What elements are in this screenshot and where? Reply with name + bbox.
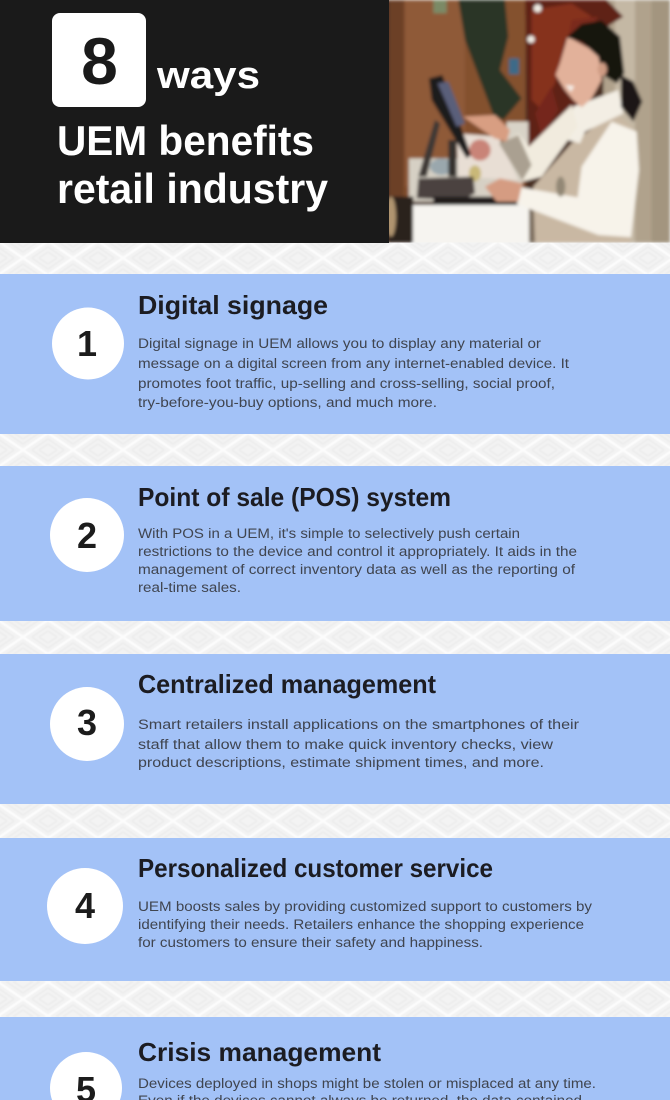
heading: UEM benefits retail industry [57,117,329,212]
description: product descriptions, estimate shipment times, and more. [138,755,544,770]
panel 5: Crisis management [0,1017,670,1100]
number badge 2 [50,498,124,572]
hands [463,115,510,142]
number badge 4: 4 [75,885,95,926]
number badge 1: 1 [77,323,97,364]
description: UEM boosts sales by providing customized support to customers by [138,899,592,914]
heading: UEM benefits retail industry: UEM benefits [57,117,314,164]
description [138,1076,596,1100]
description [138,717,580,770]
heading: Digital signage: Digital signage [138,290,328,320]
description [138,899,592,950]
patterned background [0,243,670,1100]
description: restrictions to the device and control it appropriately. It aids in the [138,544,577,559]
ponytail [621,75,642,122]
panel 3: Centralized management [0,654,670,804]
description: With POS in a UEM, it's simple to selectively push certain [138,526,520,541]
number badge 3: 3 [77,702,97,743]
number badge 1 [52,308,124,380]
face [556,37,602,107]
description: management of correct inventory data as well as the reporting of [138,562,575,577]
description: try-before-you-buy options, and much more. [138,395,437,410]
heading: UEM benefits retail industry: retail industry [57,165,329,212]
hair [567,21,624,83]
description: promotes foot traffic, up-selling and cross-selling, social proof, [138,376,555,391]
number badge 3 [50,687,124,761]
panel 1: Digital signage [0,274,670,434]
description: Digital signage in UEM allows you to display any material or [138,336,542,351]
number badge: 8: 8 [81,24,118,98]
description: real-time sales. [138,580,241,595]
description [138,336,569,410]
photo: retail worker using a POS terminal [385,0,670,243]
header panel [0,0,389,243]
turtleneck and chest [568,90,623,143]
number badge 2: 2 [77,515,97,556]
panel 2: Point of sale (POS) system [0,466,670,621]
description: for customers to ensure their safety and happiness. [138,935,483,950]
description: Devices deployed in shops might be stolen or misplaced at any time. [138,1076,596,1091]
near arm [517,122,639,237]
heading: Centralized management: Centralized management [138,669,436,699]
apron [531,118,616,243]
heading: Crisis management: Crisis management [138,1037,381,1067]
description [138,526,577,595]
description: identifying their needs. Retailers enhance the shopping experience [138,917,584,932]
heading: Point of sale (POS) system: Point of sale (POS) system [138,482,451,512]
reaching sleeve [515,102,575,184]
number badge 4 [47,868,123,944]
description: message on a digital screen from any internet-enabled device. It [138,356,569,371]
description: staff that allow them to make quick inventory checks, view [138,737,553,752]
panel 4: Personalized customer service [0,838,670,981]
number badge 5 [50,1052,122,1100]
number badge: 8 [52,13,146,107]
description: Smart retailers install applications on the smartphones of their [138,717,580,732]
heading: Personalized customer service: Personalized customer service [138,853,493,883]
heading: ways: ways [156,55,260,97]
